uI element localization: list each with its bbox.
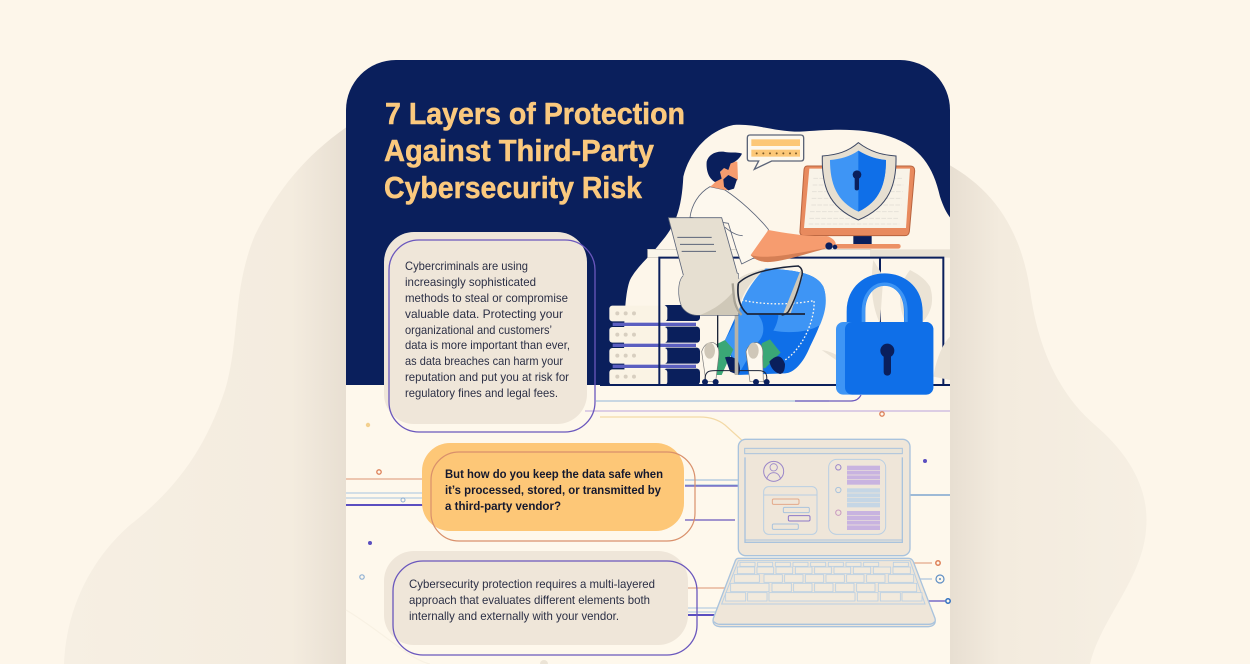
intro text block: regulatory fines and legal fees.: [405, 387, 558, 400]
lower body: [679, 268, 826, 385]
title: [384, 96, 685, 205]
circuit lines: [346, 395, 950, 664]
chair back: [668, 218, 738, 283]
intro text block: valuable data. Protecting your: [405, 308, 563, 321]
circuit dots: [360, 412, 950, 664]
chair seat: [679, 273, 738, 315]
laptop screen: [738, 439, 910, 556]
title: Against Third-Party: [384, 133, 655, 168]
arm: [751, 230, 836, 262]
trousers: [725, 268, 825, 375]
shirt: [690, 187, 768, 264]
intro text block: increasingly sophisticated: [405, 276, 536, 289]
hair: [707, 152, 742, 182]
chair stem: [735, 315, 738, 375]
upper body and head: [690, 152, 768, 264]
approach text block: [384, 551, 697, 655]
desk: [600, 249, 950, 385]
card: [346, 60, 950, 664]
intro text block: reputation and put you at risk for: [405, 371, 569, 384]
question callout: [422, 443, 695, 541]
monitor: [800, 166, 915, 249]
title: Cybersecurity Risk: [384, 170, 643, 205]
leaves: [822, 260, 950, 380]
laptop base: [713, 558, 935, 627]
intro text block: [384, 232, 595, 432]
shield: [822, 143, 896, 220]
background blob: [64, 118, 1147, 664]
avatar icon: [764, 461, 784, 481]
padlock: [836, 273, 933, 395]
server stack: [609, 305, 700, 385]
laptop illustration: [713, 439, 935, 627]
intro text block: as data breaches can harm your: [405, 355, 563, 368]
list panel: [829, 459, 886, 534]
intro text block: data is more important than ever,: [405, 339, 570, 352]
neck and face: [710, 162, 738, 190]
chair arm: [733, 266, 805, 315]
navy header: [346, 60, 950, 385]
illustration backdrop: [624, 125, 950, 385]
person: [668, 152, 837, 385]
beard: [723, 175, 737, 190]
hero illustration: [600, 125, 950, 395]
approach text block: internally and externally with your vendor.: [409, 610, 619, 623]
intro text block: methods to steal or compromise: [405, 292, 568, 305]
approach text block: approach that evaluates different elements both: [409, 594, 650, 607]
title: 7 Layers of Protection: [385, 96, 685, 131]
speech bubble: [747, 135, 804, 169]
question callout: it’s processed, stored, or transmitted by: [445, 483, 661, 497]
question callout: a third-party vendor?: [445, 499, 561, 513]
approach text block: Cybersecurity protection requires a multi-layered: [409, 578, 655, 591]
intro text block: Cybercriminals are using: [405, 260, 528, 273]
chat panel: [764, 487, 817, 534]
socks and shoes: [715, 340, 733, 375]
intro text block: organizational and customers’: [405, 324, 552, 337]
question callout: But how do you keep the data safe when: [445, 467, 663, 481]
